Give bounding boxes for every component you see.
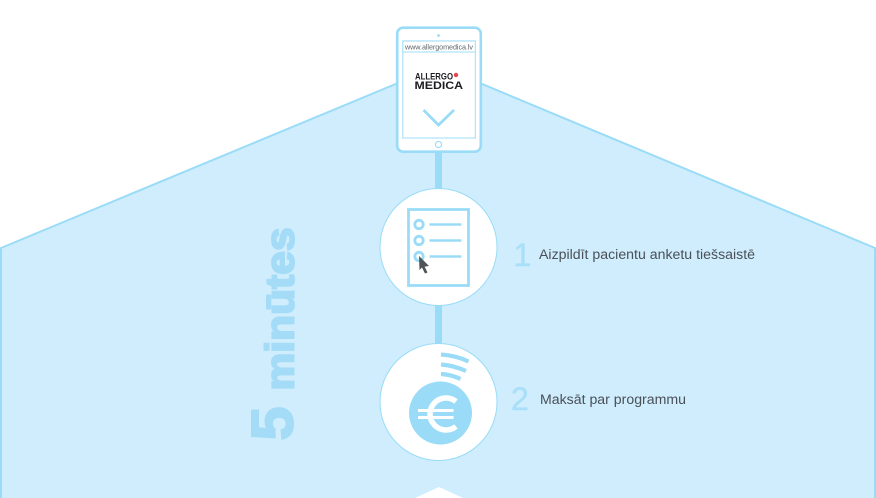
step text 2: Maksāt par programmu (540, 392, 686, 407)
logo (414, 72, 463, 92)
icon: mouse cursor (419, 256, 429, 274)
logo: MEDICA (414, 80, 463, 92)
logo: ALLERGO (415, 72, 453, 82)
icon: contactless waves (441, 354, 468, 379)
vertical heading: minūtes (258, 228, 302, 390)
vertical heading: 5 (240, 406, 306, 440)
step 2 circle (380, 344, 497, 460)
icon: euro coin (409, 382, 472, 444)
icon: home button (435, 141, 442, 148)
url text: www.allergomedica.lv (404, 42, 473, 52)
bottom white arrow (415, 487, 463, 498)
step number 2: 2 (511, 381, 529, 417)
connector line (435, 150, 442, 346)
step 1 circle (380, 188, 497, 306)
icon: chevron down (424, 110, 454, 125)
step number 1: 1 (514, 237, 531, 273)
step text 1: Aizpildīt pacientu anketu tiešsaistē (539, 247, 755, 262)
icon: tablet (397, 28, 481, 152)
vertical heading (240, 228, 306, 440)
icon: questionnaire form (408, 210, 468, 286)
